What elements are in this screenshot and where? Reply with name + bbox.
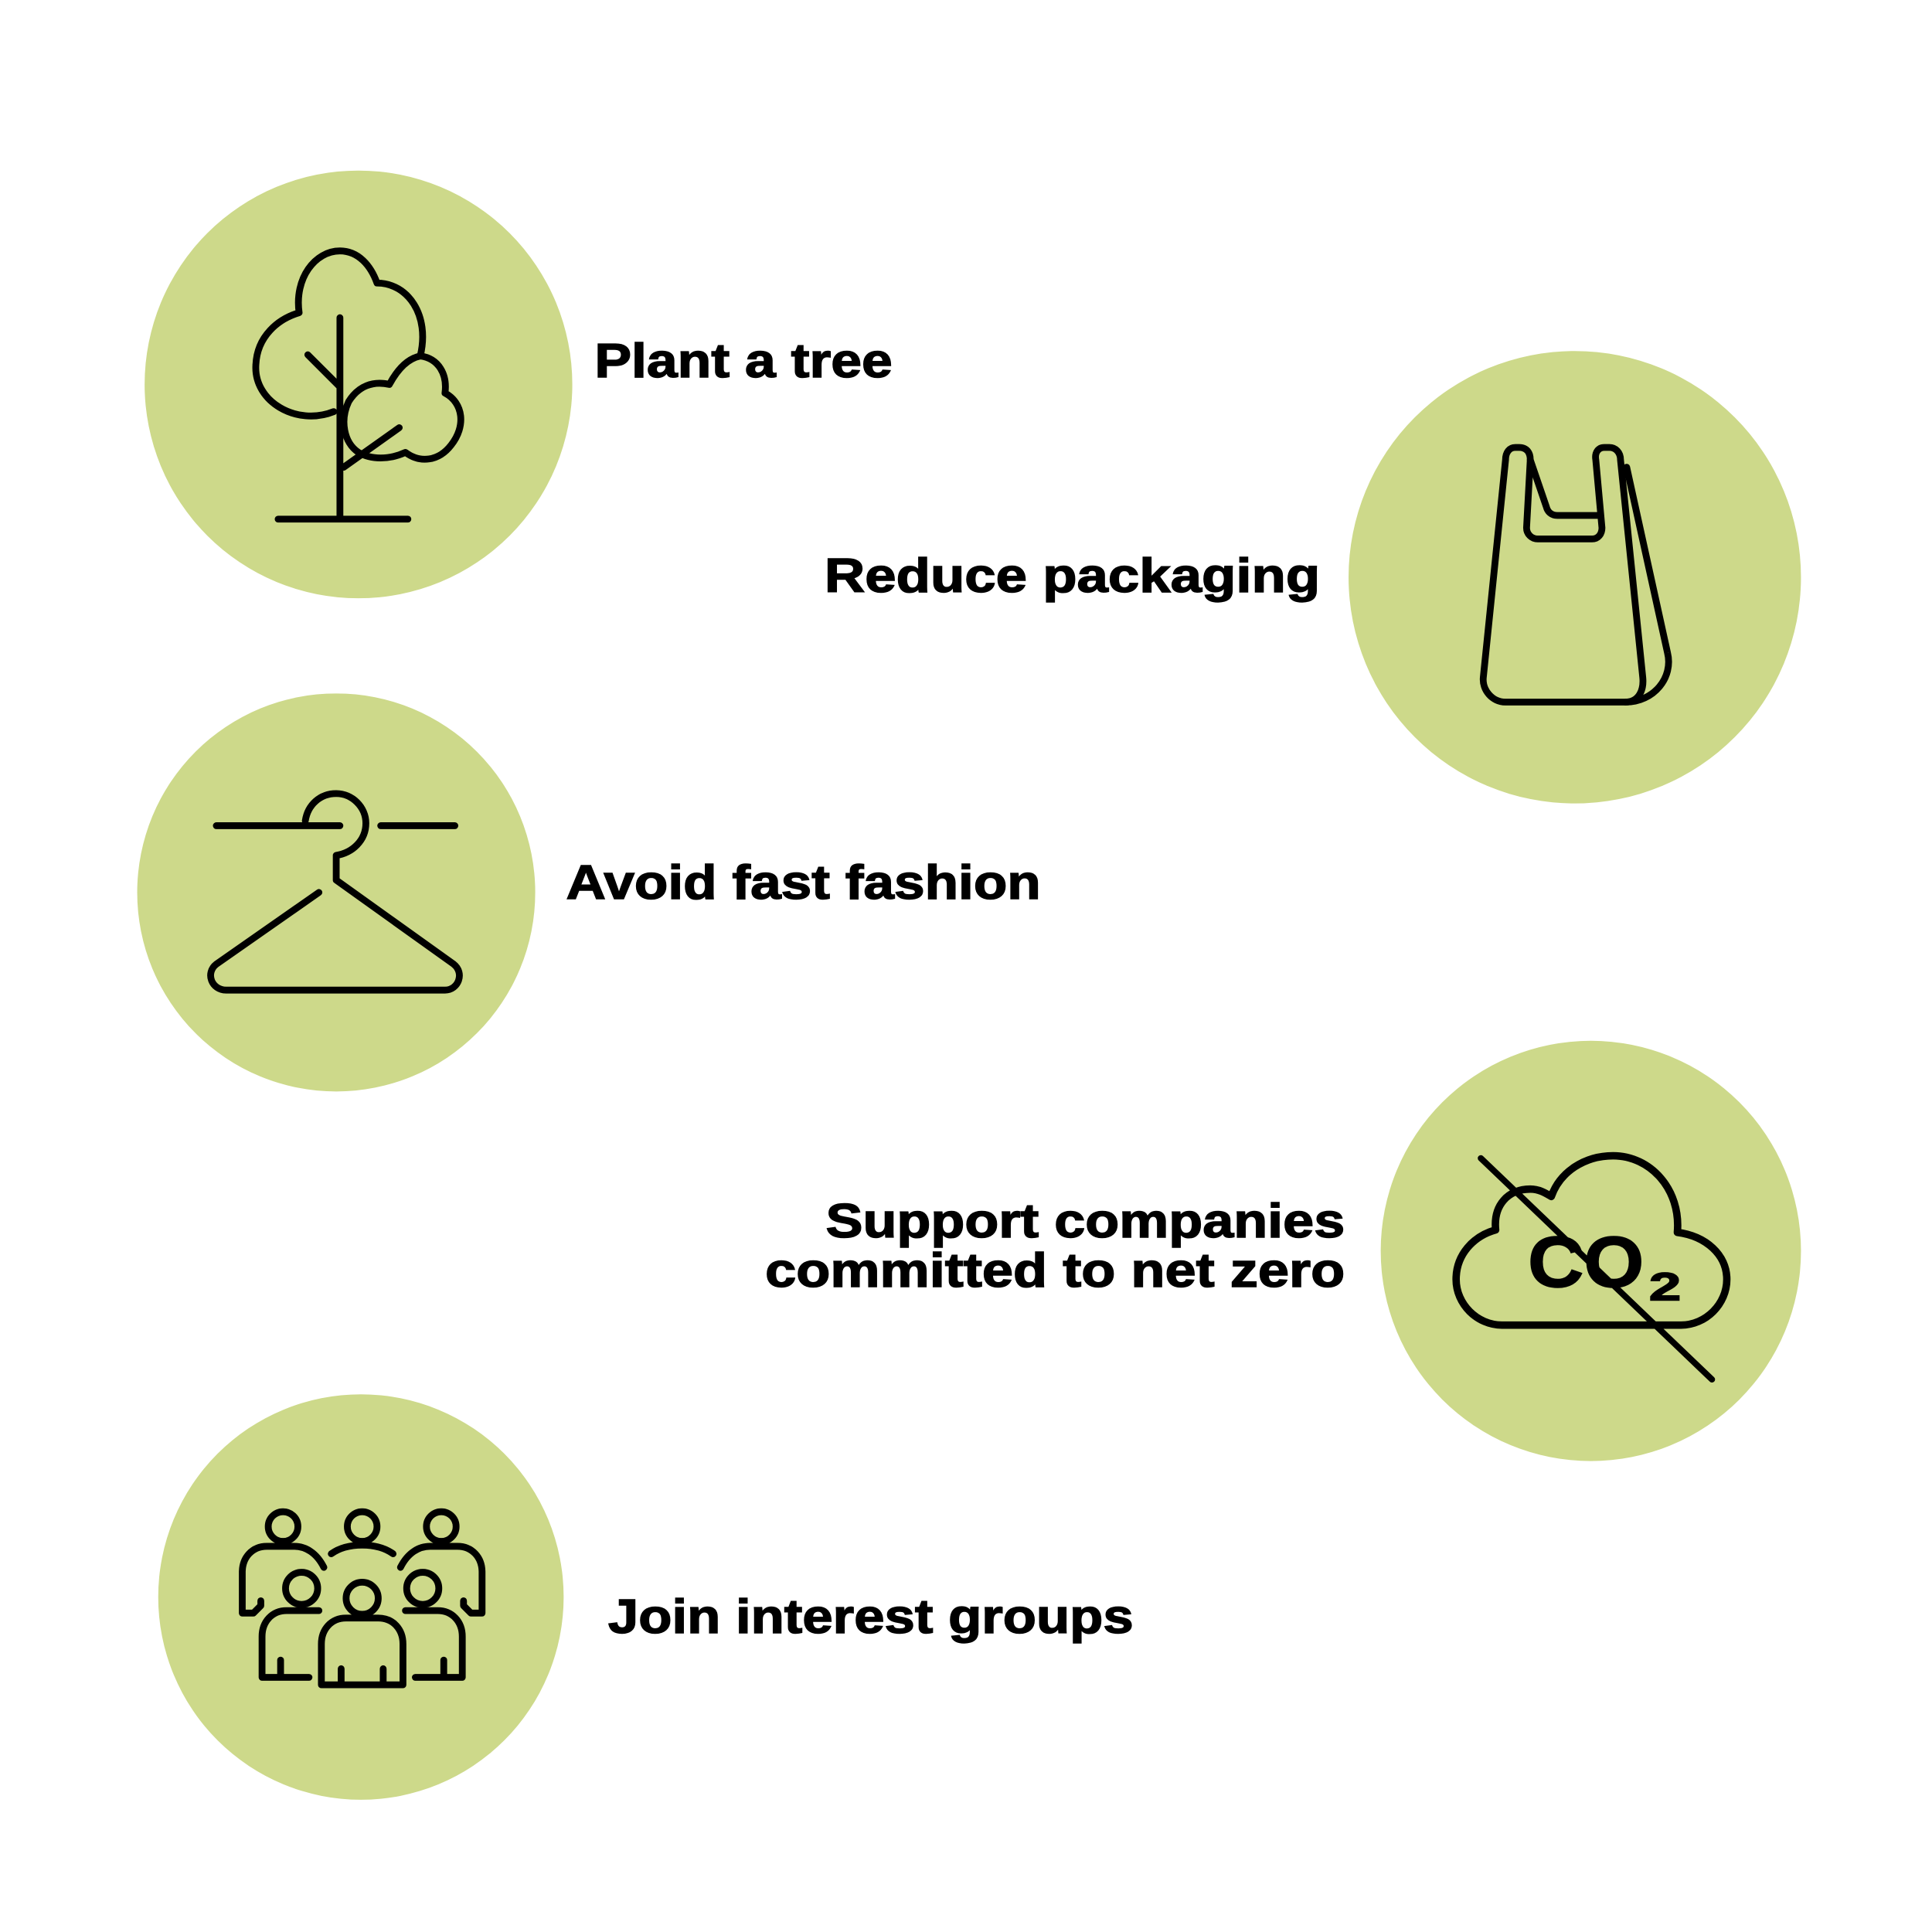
circle: hanger <box>138 693 536 1091</box>
icon: co2 cloud <box>1456 1156 1726 1379</box>
icon: hanger <box>211 794 459 990</box>
panel: reduce packaging <box>825 351 1801 804</box>
circle: people <box>158 1394 563 1800</box>
panel: net zero <box>825 1041 1801 1461</box>
label: reduce packaging: Reduce packaging <box>825 549 1320 603</box>
label: avoid fast fashion: Avoid fast fashion <box>566 856 1041 910</box>
icon: group of people <box>242 1512 482 1685</box>
label: net zero: Support companies <box>825 1195 1345 1248</box>
circle: tree <box>145 171 573 598</box>
panel: plant a tree <box>145 171 893 598</box>
circle: co2 <box>1381 1041 1801 1461</box>
label: net zero line 2: committed to net zero <box>765 1244 1345 1298</box>
icon: plastic bag <box>1483 447 1668 702</box>
circle: bag <box>1349 351 1801 804</box>
panel: join interest groups <box>158 1394 1134 1800</box>
label: plant a tree: Plant a tree <box>594 335 893 388</box>
panel: avoid fast fashion <box>138 693 1041 1091</box>
icon: tree <box>256 251 461 519</box>
label: join interest groups: Join interest groups <box>608 1590 1134 1644</box>
icon: co2 cloud: CO <box>1528 1222 1644 1302</box>
icon: co2 cloud: 2 <box>1649 1265 1681 1309</box>
